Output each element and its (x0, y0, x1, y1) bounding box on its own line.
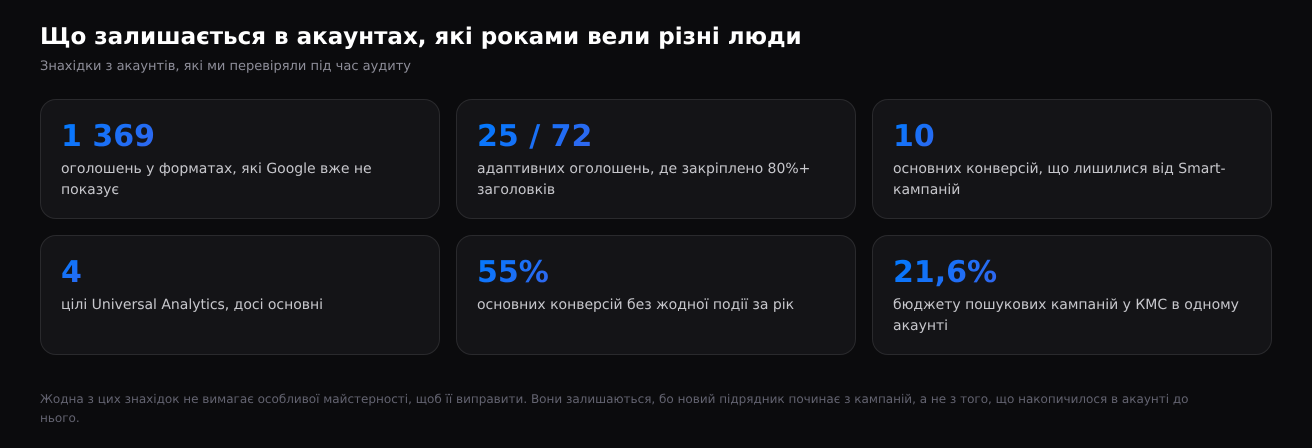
stat number: 55% (477, 255, 549, 290)
stat description: оголошень у форматах, які Google вже не показує (61, 161, 372, 198)
title: Що залишається в акаунтах, які роками вели різні люди (40, 24, 802, 50)
stat description: цілі Universal Analytics, досі основні (61, 297, 323, 313)
panel: stat 10 (872, 99, 1272, 219)
stat description: адаптивних оголошень, де закріплено 80%+ заголовків (477, 161, 810, 198)
stat number: 1 369 (61, 119, 155, 154)
stat number: 10 (893, 119, 935, 154)
panel: stat 1 369 (40, 99, 440, 219)
footnote: Жодна з цих знахідок не вимагає особливої майстерності, щоб її виправити. Вони залишаються, бо новий підрядник починає з кампаній, а не з того, що накопичилося в акаунті до нього. (40, 392, 1189, 425)
stat description: основних конверсій без жодної події за рік (477, 297, 794, 313)
stat number: 21,6% (893, 255, 997, 290)
stat number: 25 / 72 (477, 119, 592, 154)
stat description: основних конверсій, що лишилися від Smart-кампаній (893, 161, 1226, 198)
panel: stat 4 (40, 235, 440, 355)
panel: stat 21,6% (872, 235, 1272, 355)
panel: stat 55% (456, 235, 856, 355)
panel: stat 25 / 72 (456, 99, 856, 219)
subtitle: Знахідки з акаунтів, які ми перевіряли під час аудиту (40, 59, 411, 74)
stat number: 4 (61, 255, 82, 290)
stat description: бюджету пошукових кампаній у КМС в одному акаунті (893, 297, 1239, 334)
